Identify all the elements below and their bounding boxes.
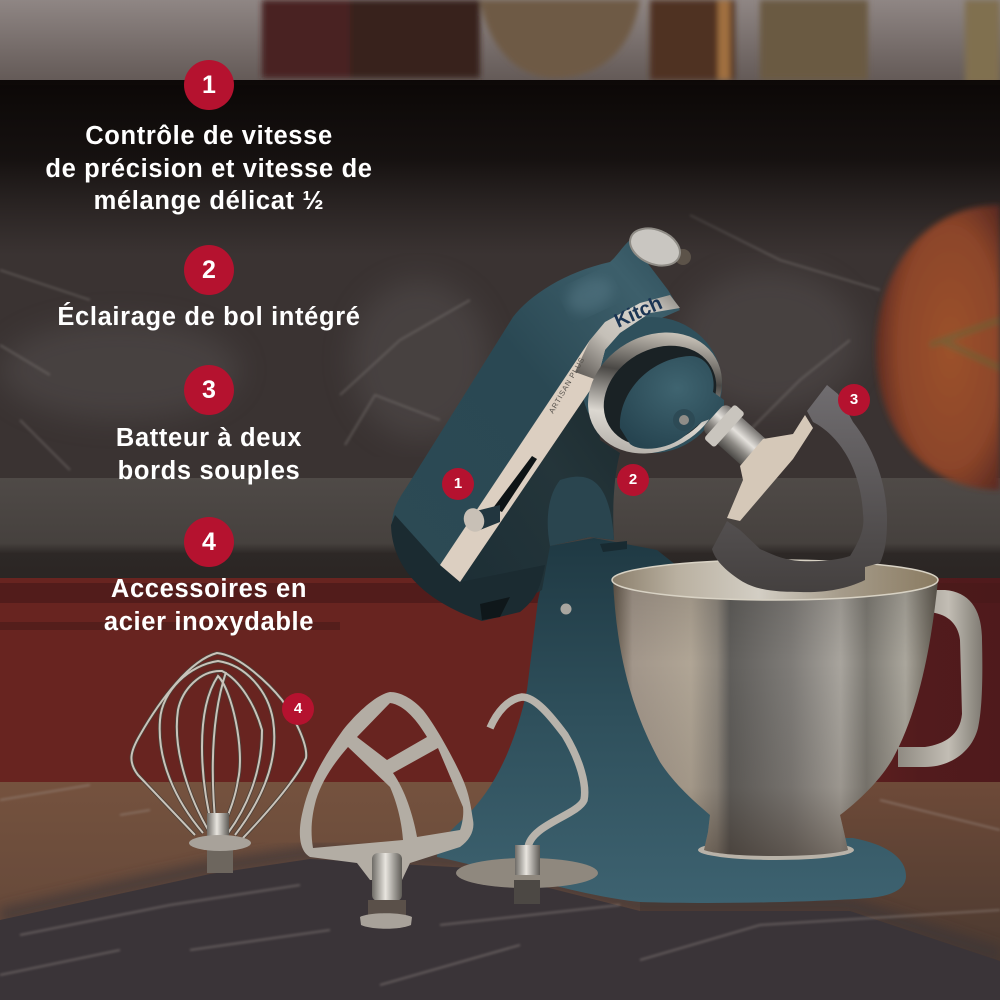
- callout 1 text: mélange délicat ½: [94, 187, 324, 215]
- model label: ARTISAN PLUS: [547, 355, 587, 415]
- beater shaft: [698, 399, 782, 481]
- head highlight: [561, 270, 619, 320]
- callout 1 number: [184, 60, 234, 110]
- base ring under bowl: [698, 840, 854, 860]
- cream speed plate: [440, 340, 605, 582]
- steel knob: [625, 221, 685, 273]
- callout 1 text: Contrôle de vitesse: [85, 122, 333, 150]
- callout 1 number: 1: [202, 71, 216, 99]
- lower grille: [480, 597, 510, 620]
- callout 4 text: acier inoxydable: [104, 608, 314, 636]
- bowl handle: [898, 590, 982, 767]
- callout 3 text: bords souples: [118, 456, 300, 484]
- callout 3 number: [184, 365, 234, 415]
- lower neck: [460, 380, 620, 612]
- callout 4 text: [104, 575, 314, 636]
- marble table top: [0, 782, 1000, 1000]
- callout 2 text: Éclairage de bol intégré: [57, 303, 361, 331]
- brand label: Kitch: [611, 292, 666, 333]
- callout 2 number: 2: [202, 256, 216, 284]
- flat beater: [300, 692, 473, 929]
- callout 4 text: Accessoires en: [111, 575, 307, 603]
- marker 3 on beater: [838, 384, 870, 416]
- chrome ring: [566, 309, 744, 477]
- steel knob pin: [675, 249, 691, 265]
- speed slot: [493, 456, 537, 512]
- steel band: [575, 295, 680, 380]
- mixer: [391, 221, 982, 903]
- head lower shadow: [391, 515, 545, 621]
- callout 3 text: Batteur à deux: [116, 424, 302, 452]
- callout 1 text: de précision et vitesse de: [45, 154, 373, 182]
- marker 4 on accessories: [282, 693, 314, 725]
- pedestal pin: [560, 604, 572, 614]
- bowl rim: [612, 560, 938, 600]
- pedestal slot: [600, 541, 627, 552]
- flex edge beater: [712, 385, 887, 592]
- marker 2 on bowl light: 2: [629, 471, 637, 488]
- callout 2 number: [184, 245, 234, 295]
- callout 3 number: 3: [202, 376, 216, 404]
- planetary dome: [620, 356, 724, 449]
- wire whisk: [131, 653, 306, 873]
- marker 4 on accessories: 4: [294, 700, 302, 717]
- cutting board: [876, 205, 1000, 490]
- marker 3 on beater: 3: [850, 391, 858, 408]
- background wall and shelf: [0, 0, 1000, 783]
- bowl body: [613, 580, 938, 856]
- mixer base and pedestal: [437, 538, 906, 903]
- speed lever: [460, 505, 500, 535]
- motor head: [392, 240, 680, 582]
- callout 4 number: 4: [202, 528, 216, 556]
- callout 1 text: [45, 122, 373, 215]
- marker 1 on speed control: [442, 468, 474, 500]
- dough hook: [456, 697, 598, 904]
- planetary hub: [673, 409, 695, 431]
- marker 2 on bowl light: [617, 464, 649, 496]
- teal collar: [582, 317, 722, 453]
- callout 4 number: [184, 517, 234, 567]
- marker 1 on speed control: 1: [454, 475, 462, 492]
- callout 3 text: [116, 424, 302, 484]
